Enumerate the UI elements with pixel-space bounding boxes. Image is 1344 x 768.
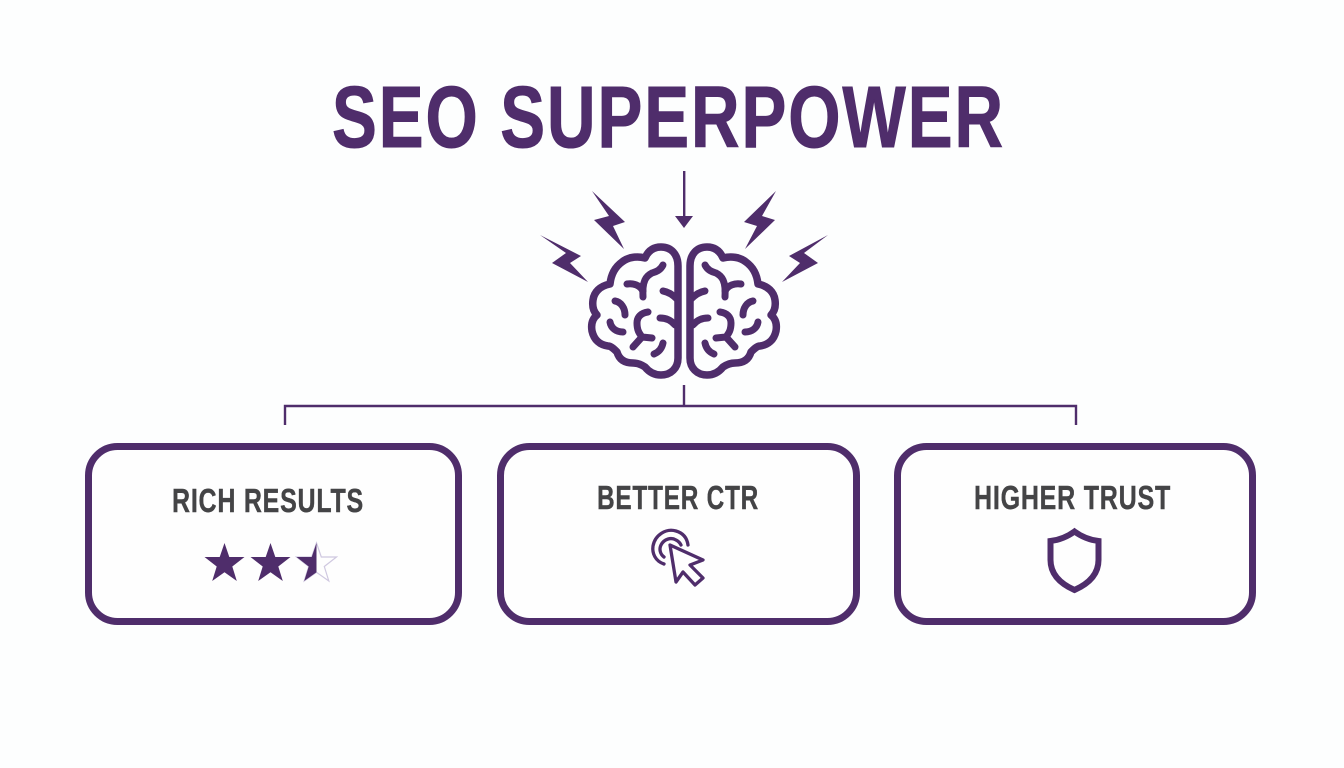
panel: rich results (88, 446, 458, 622)
arrow: down into brain (675, 171, 693, 228)
brain right hemisphere (690, 247, 776, 375)
heading: rich results: RICH RESULTS (172, 482, 364, 519)
heading: better ctr: BETTER CTR (597, 479, 759, 516)
icon: cursor click (653, 530, 703, 585)
panel: better ctr (500, 446, 856, 622)
title: SEO SUPERPOWER (332, 69, 1005, 166)
brain left hemisphere (592, 247, 678, 375)
icon: brain (592, 247, 776, 375)
panel: higher trust (898, 446, 1252, 622)
icon: star rating (204, 543, 336, 581)
icon: shield (1050, 532, 1098, 590)
heading: higher trust: HIGHER TRUST (974, 479, 1171, 516)
connector lines (285, 385, 1076, 425)
icon: lightning bolts (540, 191, 828, 282)
